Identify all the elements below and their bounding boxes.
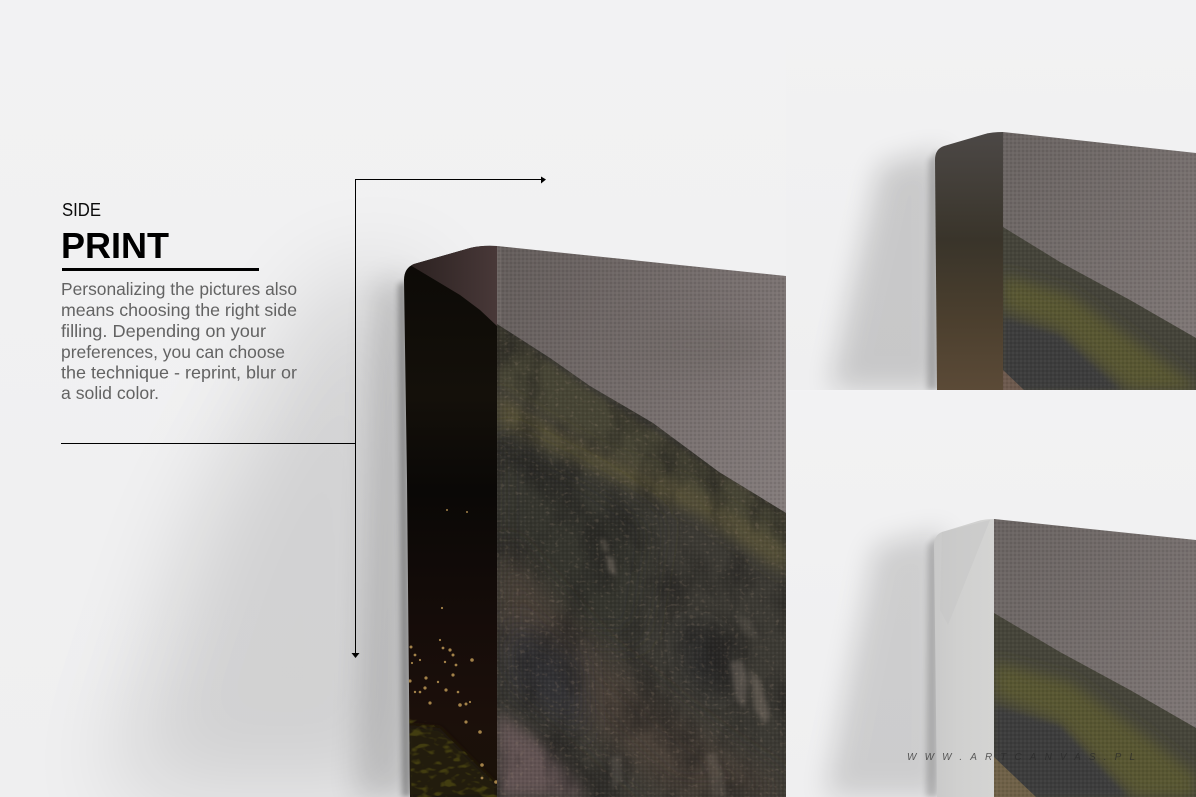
heading: side: SIDE <box>62 200 101 220</box>
gold flowers <box>408 509 498 784</box>
foliage speckle <box>409 718 497 797</box>
text block: description: preferences, you can choose <box>61 342 285 362</box>
wall shadow <box>830 150 945 390</box>
rock highlights <box>600 538 770 797</box>
text block: description <box>61 279 297 403</box>
mountain <box>497 310 786 797</box>
heading: print: PRINT <box>61 225 169 266</box>
text block: description: the technique - reprint, blur or <box>61 362 297 382</box>
infographic: side print canvas views <box>61 132 1196 797</box>
canvas side edge <box>404 246 497 797</box>
text block: description: a solid color. <box>61 383 159 403</box>
canvas front face <box>497 246 786 797</box>
canvas side edge <box>934 519 994 797</box>
heading underline <box>62 268 259 271</box>
panel: solid colour side option <box>818 519 1196 797</box>
text block: description: Personalizing the pictures also <box>61 279 297 299</box>
canvas side edge <box>935 132 1005 390</box>
canvas front face <box>1003 132 1196 390</box>
arrow: dimension bracket <box>61 176 546 658</box>
watermark: WWW.ARTCANVAS.PL <box>907 752 1135 763</box>
canvas front face <box>994 519 1196 797</box>
fold sheen <box>497 246 501 270</box>
panel: main canvas close-up <box>98 246 786 797</box>
wall shadow <box>825 530 945 797</box>
text block: description: filling. Depending on your <box>61 321 266 341</box>
panel: reprint side option <box>822 132 1196 390</box>
wall shadow <box>110 270 420 797</box>
arrowhead: down <box>352 653 360 658</box>
panel divider <box>786 390 1196 392</box>
mottled rock texture <box>497 310 786 797</box>
arrowhead: right <box>541 176 546 184</box>
text block: description: means choosing the right side <box>61 300 297 320</box>
